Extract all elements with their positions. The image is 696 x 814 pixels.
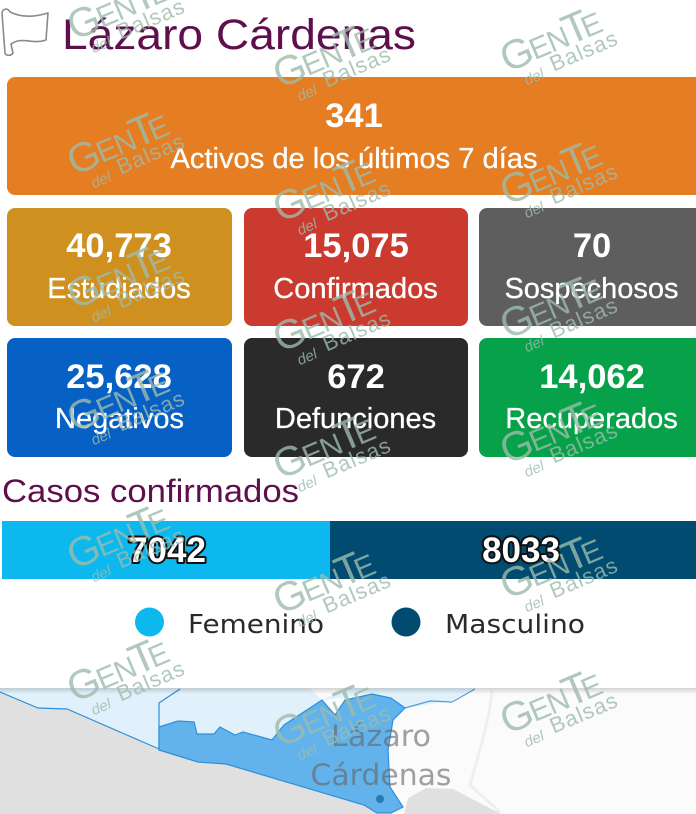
panel: confirmados xyxy=(244,208,468,326)
watermarks: Gente del Balsas: del xyxy=(295,215,320,239)
map: place label xyxy=(310,719,452,792)
watermarks: Gente del Balsas: G xyxy=(493,688,540,743)
watermarks: Gente del Balsas: Balsas xyxy=(319,567,395,618)
panel: recuperados xyxy=(479,338,696,457)
watermarks: Gente del Balsas: G xyxy=(60,129,107,184)
legend xyxy=(135,608,585,640)
title: Lázaro Cárdenas xyxy=(62,11,416,59)
watermarks: Gente del Balsas: del xyxy=(89,695,114,719)
negativos label: Negativos xyxy=(55,403,184,435)
watermarks: Gente del Balsas: Balsas xyxy=(319,41,395,92)
panel: activos xyxy=(7,77,696,195)
watermarks: Gente del Balsas: Balsas xyxy=(546,552,622,603)
watermarks: Gente del Balsas: G xyxy=(266,306,313,361)
watermarks: Gente del Balsas: G xyxy=(266,42,313,97)
watermarks: Gente del Balsas: del xyxy=(295,345,320,369)
bar: femenino xyxy=(2,521,330,579)
watermarks: Gente del Balsas: Balsas xyxy=(113,522,189,573)
watermarks: Gente del Balsas: del xyxy=(522,727,547,751)
stacked bar chart xyxy=(2,521,696,579)
watermarks: Gente del Balsas: G xyxy=(266,701,313,756)
watermarks: Gente del Balsas: del xyxy=(89,33,114,57)
map: grey sea area xyxy=(0,692,377,814)
watermarks: Gente del Balsas: ENTE xyxy=(520,263,608,336)
watermarks: Gente del Balsas: ENTE xyxy=(520,129,608,202)
watermarks: Gente del Balsas: G xyxy=(493,26,540,81)
watermarks: Gente del Balsas: G xyxy=(60,263,107,318)
watermarks: Gente del Balsas: del xyxy=(522,457,547,481)
watermarks: Gente del Balsas: del xyxy=(295,607,320,631)
watermarks: Gente del Balsas: del xyxy=(522,592,547,616)
watermarks: Gente del Balsas: G xyxy=(493,553,540,608)
panel: negativos xyxy=(7,338,232,457)
watermarks: Gente del Balsas: ENTE xyxy=(293,671,381,744)
watermarks: Gente del Balsas: ENTE xyxy=(293,146,381,219)
watermarks: Gente del Balsas: Balsas xyxy=(546,292,622,343)
legend: femenino xyxy=(135,608,324,640)
watermarks: Gente del Balsas: del xyxy=(89,168,114,192)
activos number: 341 xyxy=(325,97,383,135)
panel: estudiados xyxy=(7,208,232,326)
watermarks: Gente del Balsas: G xyxy=(493,418,540,473)
watermarks: Gente del Balsas: Balsas xyxy=(546,25,622,76)
activos label: Activos de los últimos 7 días xyxy=(170,143,538,175)
map: location dot xyxy=(376,795,384,803)
watermarks: Gente del Balsas xyxy=(59,0,622,769)
watermarks: Gente del Balsas: ENTE xyxy=(87,626,175,699)
watermarks: Gente del Balsas: ENTE xyxy=(293,276,381,349)
watermarks: Gente del Balsas: G xyxy=(60,656,107,711)
watermarks: Gente del Balsas: del xyxy=(89,425,114,449)
sospechosos number: 70 xyxy=(573,227,611,265)
bar: masculino: 8033 xyxy=(482,531,560,570)
legend: masculino xyxy=(392,608,585,640)
recuperados label: Recuperados xyxy=(505,403,678,435)
watermarks: Gente del Balsas: Balsas xyxy=(319,305,395,356)
bar: femenino: 7042 xyxy=(128,531,206,570)
negativos number: 25,628 xyxy=(66,358,172,396)
watermarks: Gente del Balsas: Balsas xyxy=(546,417,622,468)
watermarks: Gente del Balsas: G xyxy=(266,568,313,623)
watermarks: Gente del Balsas: del xyxy=(89,562,114,586)
map: road lines xyxy=(470,690,500,812)
watermarks: Gente del Balsas: ENTE xyxy=(520,523,608,596)
watermarks: Gente del Balsas: G xyxy=(60,523,107,578)
watermarks: Gente del Balsas: Balsas xyxy=(546,158,622,209)
watermarks: Gente del Balsas: Balsas xyxy=(319,432,395,483)
watermarks: Gente del Balsas: ENTE xyxy=(520,658,608,731)
sospechosos label: Sospechosos xyxy=(504,273,679,305)
watermarks: Gente del Balsas: del xyxy=(522,332,547,356)
watermarks: Gente del Balsas: Balsas xyxy=(319,175,395,226)
watermarks: Gente del Balsas: ENTE xyxy=(87,356,175,429)
map: coast line east xyxy=(405,689,475,708)
watermarks: Gente del Balsas: del xyxy=(295,472,320,496)
map: grey bay xyxy=(404,788,501,814)
bar: masculino xyxy=(330,521,696,579)
watermarks: Gente del Balsas: ENTE xyxy=(87,99,175,172)
watermarks: Gente del Balsas: ENTE xyxy=(520,388,608,461)
watermarks: Gente del Balsas: ENTE xyxy=(87,233,175,306)
confirmados label: Confirmados xyxy=(273,273,438,305)
watermarks: Gente del Balsas: Balsas xyxy=(113,262,189,313)
watermarks: Gente del Balsas: del xyxy=(295,81,320,105)
watermarks: Gente del Balsas: G xyxy=(493,159,540,214)
map: municipality boundary lines xyxy=(0,689,180,749)
watermarks: Gente del Balsas: Balsas xyxy=(113,385,189,436)
watermarks: Gente del Balsas: ENTE xyxy=(293,12,381,85)
confirmados number: 15,075 xyxy=(303,227,409,265)
defunciones number: 672 xyxy=(327,358,385,396)
watermarks: Gente del Balsas: Balsas xyxy=(319,700,395,751)
watermarks: Gente del Balsas: G xyxy=(266,176,313,231)
estudiados number: 40,773 xyxy=(66,227,172,265)
panel: defunciones xyxy=(244,338,468,457)
watermarks: Gente del Balsas: G xyxy=(60,386,107,441)
panel: sospechosos xyxy=(479,208,696,326)
watermarks: Gente del Balsas: G xyxy=(266,433,313,488)
watermarks: Gente del Balsas: Balsas xyxy=(113,655,189,706)
watermarks: Gente del Balsas: ENTE xyxy=(293,403,381,476)
watermarks: Gente del Balsas: ENTE xyxy=(87,493,175,566)
map: light blue neighbouring areas xyxy=(0,688,475,750)
map xyxy=(0,688,696,814)
watermarks: Gente del Balsas: Balsas xyxy=(113,128,189,179)
map: place label: Cárdenas xyxy=(310,758,452,792)
watermarks: Gente del Balsas: Balsas xyxy=(546,687,622,738)
legend: femenino: Femenino xyxy=(188,610,324,640)
watermarks: Gente del Balsas: G xyxy=(493,293,540,348)
watermarks: Gente del Balsas: del xyxy=(295,740,320,764)
map: place label: Lázaro xyxy=(331,719,431,753)
map: Lázaro Cárdenas municipality xyxy=(159,694,405,813)
watermarks: Gente del Balsas: del xyxy=(522,198,547,222)
icon: flag xyxy=(2,9,48,55)
heading: casos confirmados: Casos confirmados xyxy=(2,473,299,509)
watermarks: Gente del Balsas: ENTE xyxy=(520,0,608,69)
watermarks: Gente del Balsas: ENTE xyxy=(293,538,381,611)
defunciones label: Defunciones xyxy=(275,403,436,435)
watermarks: Gente del Balsas: del xyxy=(522,65,547,89)
estudiados label: Estudiados xyxy=(47,273,191,305)
watermarks: Gente del Balsas: del xyxy=(89,302,114,326)
recuperados number: 14,062 xyxy=(539,358,645,396)
legend: masculino: Masculino xyxy=(445,610,585,640)
